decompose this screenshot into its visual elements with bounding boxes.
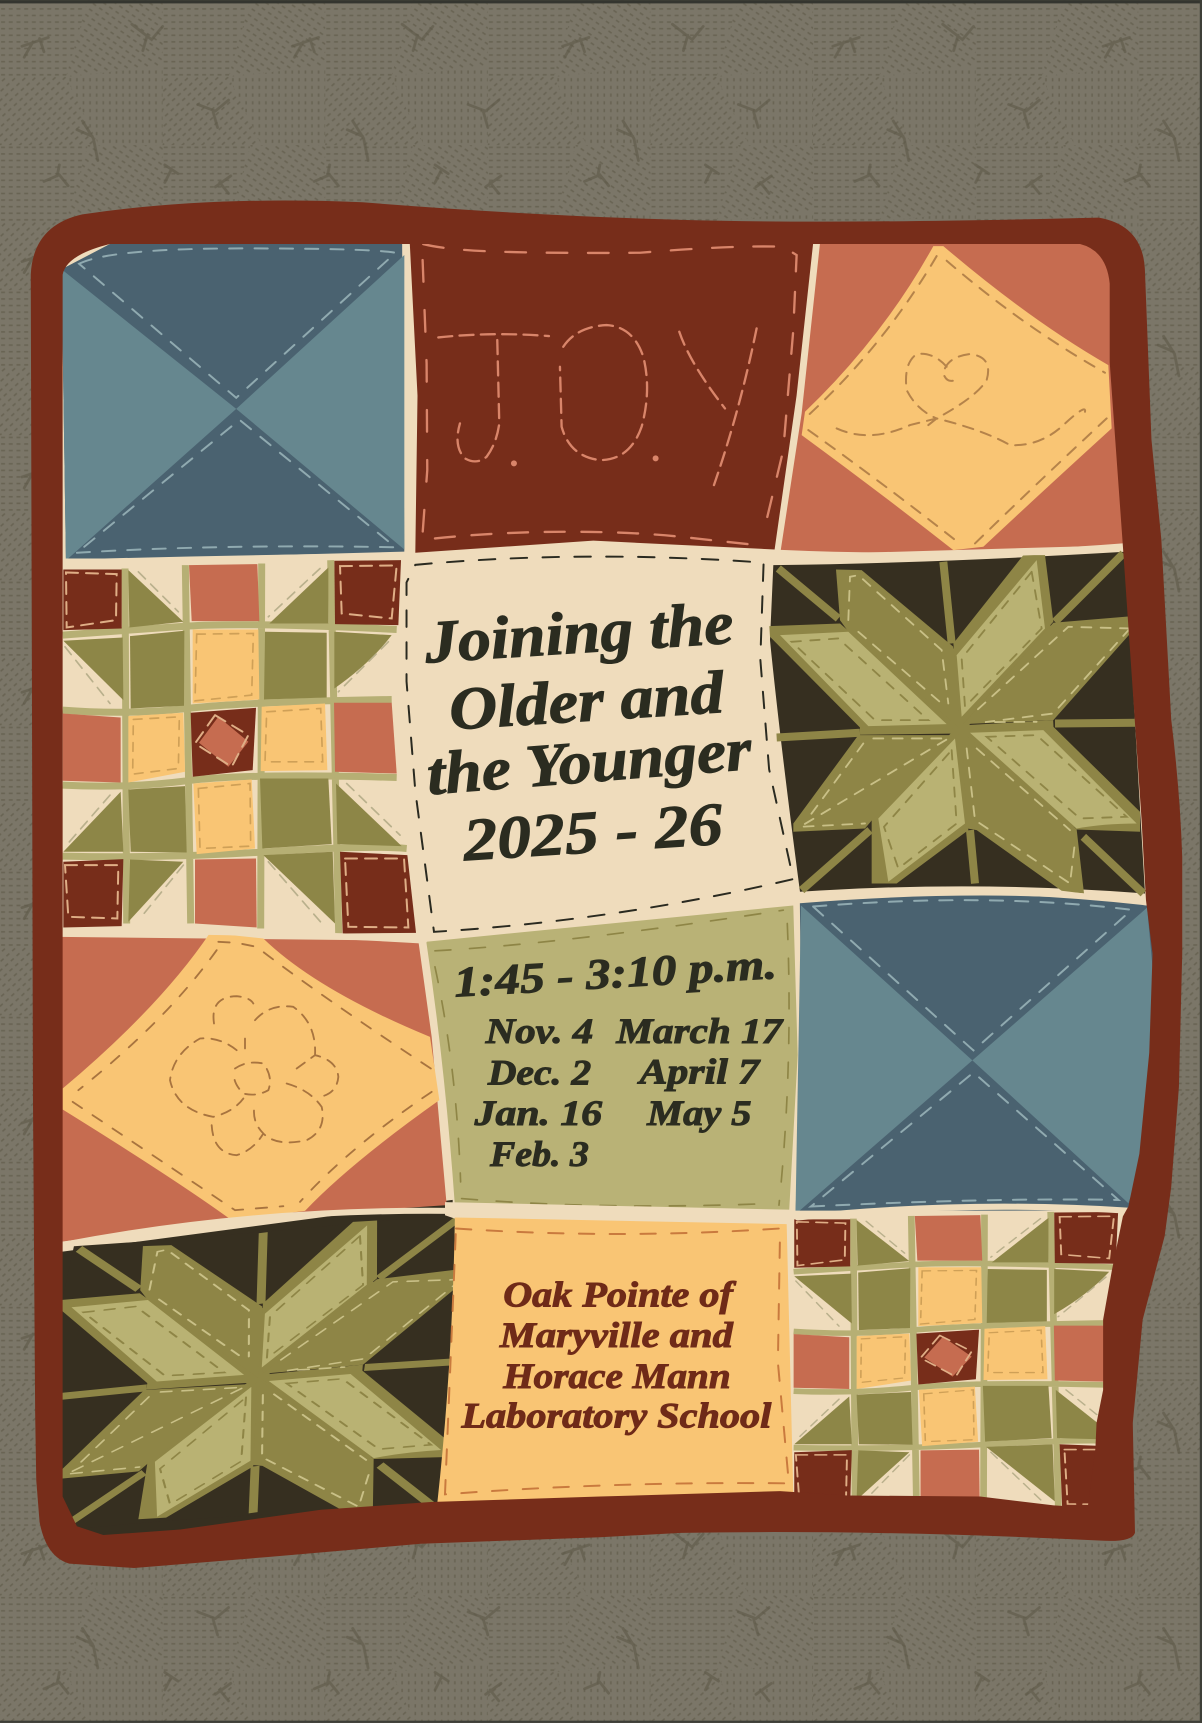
patch: peach diamond with heart <box>780 243 1127 555</box>
JOY stitched letters <box>438 325 757 485</box>
event dates <box>473 1011 784 1174</box>
title: Older and <box>447 659 726 744</box>
title <box>422 590 754 874</box>
patch: JOY stitched <box>410 244 813 553</box>
location text: Laboratory School <box>460 1395 772 1435</box>
patch: big star right <box>769 552 1145 893</box>
stitched flower <box>170 996 338 1155</box>
title: Joining the <box>422 590 735 677</box>
patch: blue hourglass right <box>795 896 1165 1214</box>
patch: big star lower left <box>23 1211 489 1534</box>
event dates: Nov. 4 <box>485 1011 593 1051</box>
cream seam above location block <box>445 1202 793 1224</box>
event dates: Feb. 3 <box>489 1134 589 1174</box>
patch: quilt star lower right <box>794 1211 1133 1509</box>
stitched heart <box>837 354 1085 445</box>
quilt cream backing <box>49 236 1165 1527</box>
location text <box>460 1274 772 1435</box>
title: the Younger <box>424 716 754 808</box>
patch: time and dates <box>426 905 798 1216</box>
cream seams between rows <box>63 546 1154 1245</box>
location text: Oak Pointe of <box>503 1274 737 1314</box>
event time: 1:45 - 3:10 p.m. <box>453 941 778 1007</box>
event dates: Dec. 2 <box>487 1053 591 1093</box>
event dates: May 5 <box>646 1093 752 1133</box>
title: 2025 - 26 <box>460 791 725 874</box>
patch: quilt star left <box>63 558 417 933</box>
patch: peach diamond with flower <box>60 933 447 1242</box>
location text: Horace Mann <box>502 1356 731 1396</box>
patch: blue hourglass top left <box>62 244 404 560</box>
patch: location block <box>437 1217 793 1503</box>
patch: big star lower left backing <box>55 1200 453 1544</box>
location text: Maryville and <box>499 1315 734 1355</box>
quilt border <box>31 201 1182 1568</box>
event dates: Jan. 16 <box>473 1093 603 1133</box>
event dates: March 17 <box>615 1011 784 1051</box>
patch: title block <box>402 553 802 936</box>
event dates: April 7 <box>637 1051 761 1091</box>
